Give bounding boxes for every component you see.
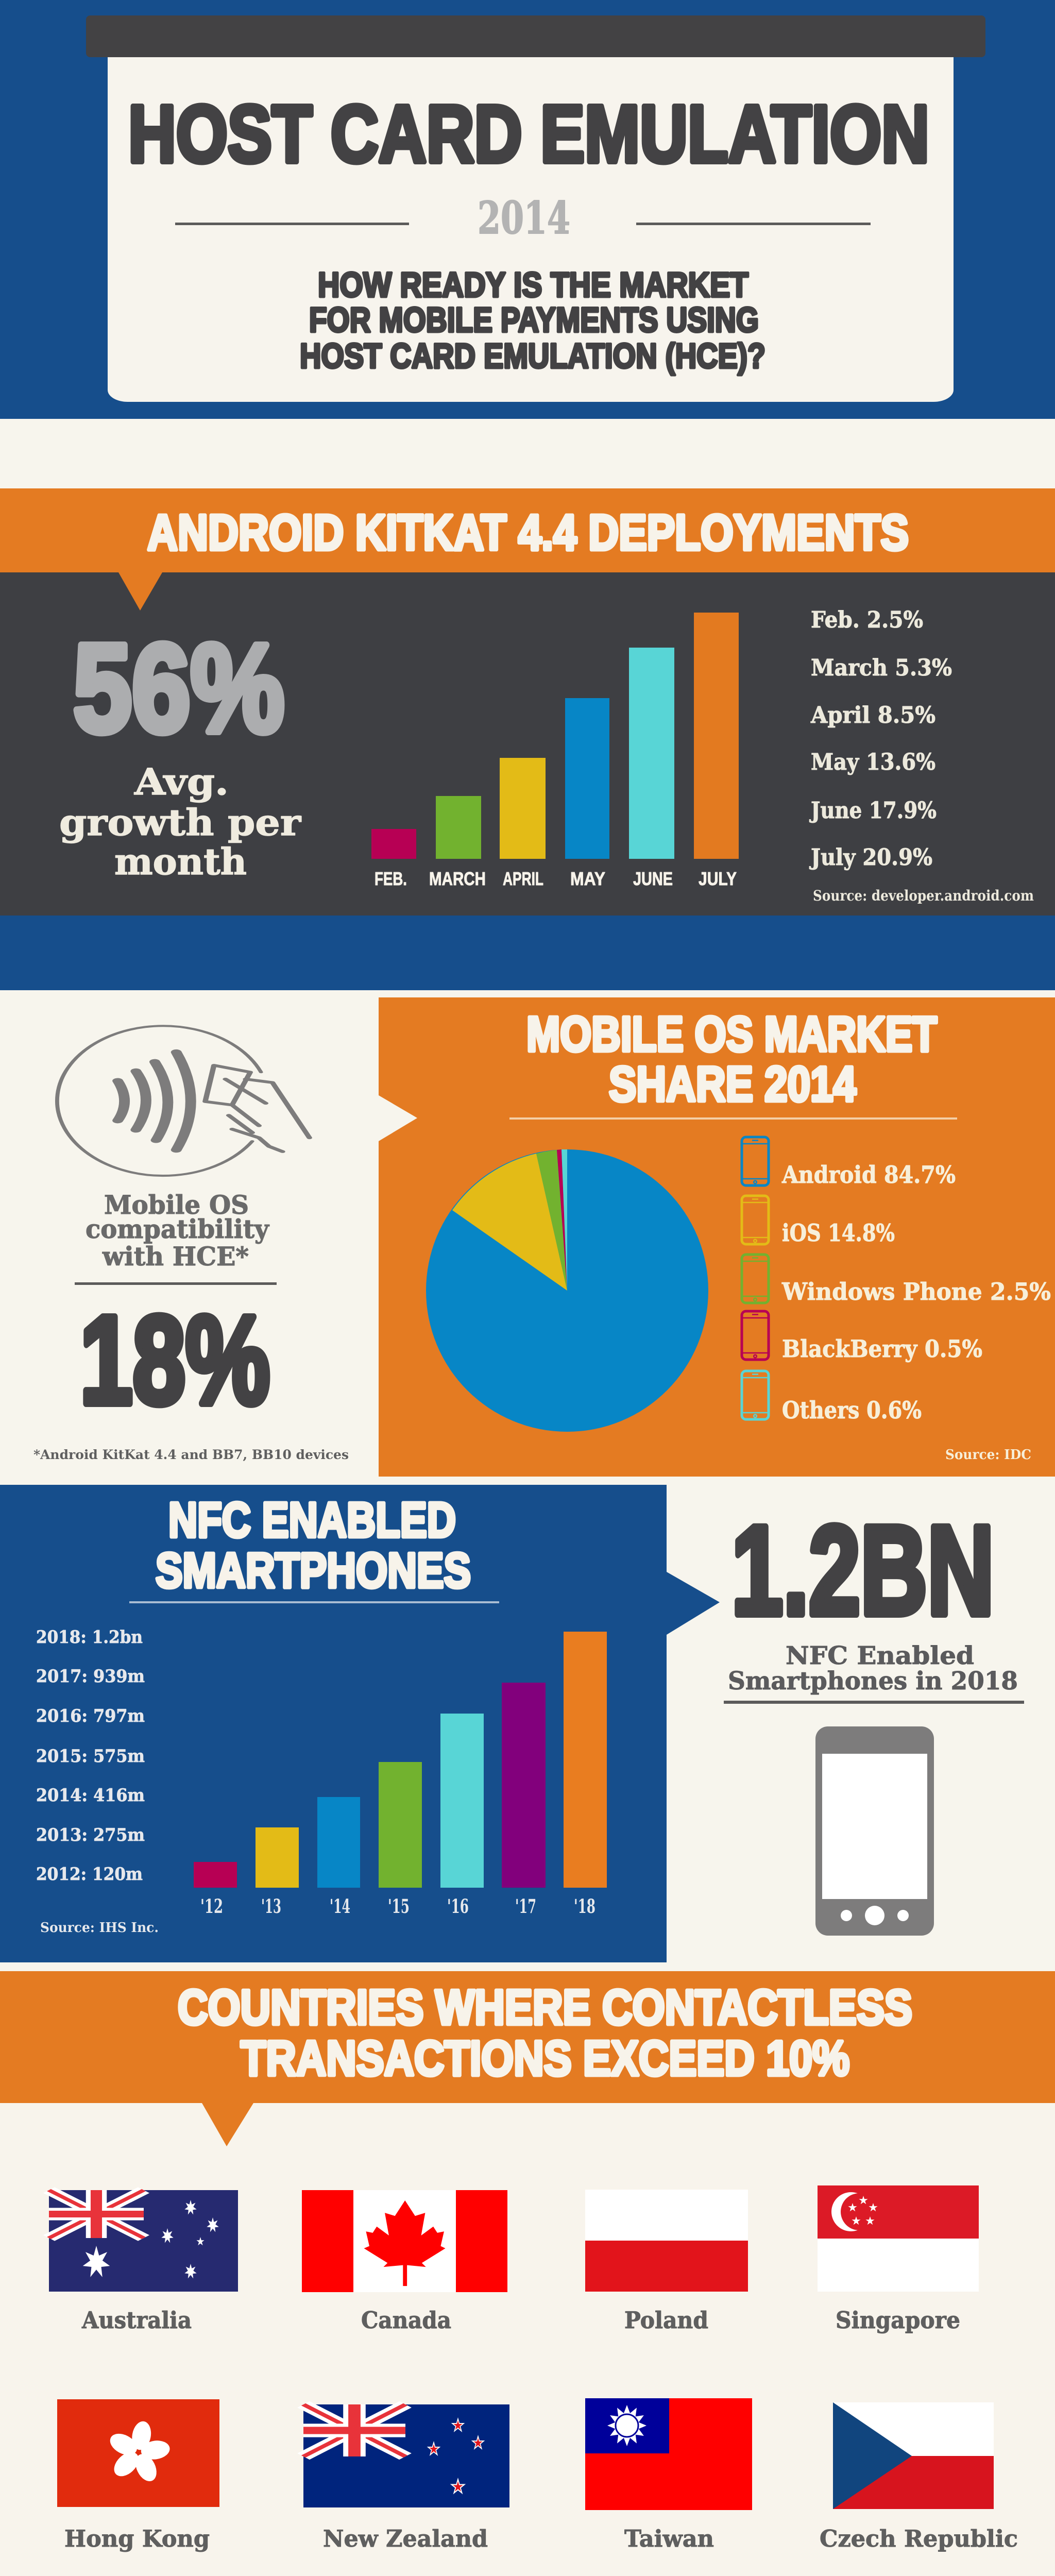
bar chart: '16 — [447, 1895, 469, 1918]
stat caption: month — [114, 840, 247, 883]
monthly values list: June 17.9% — [809, 798, 937, 824]
stat caption — [728, 1641, 1018, 1696]
heading: MOBILE OS MARKET — [526, 1007, 937, 1062]
monthly values list: May 13.6% — [811, 749, 935, 775]
panel: NFC enabled smartphones — [0, 1485, 720, 1962]
bar chart: '12 — [200, 1895, 223, 1918]
legend: Android — [742, 1137, 956, 1189]
monthly values list: Feb. 2.5% — [811, 607, 923, 633]
panel: 1.2BN stat — [724, 1500, 1024, 1936]
stat caption: Avg. — [134, 760, 229, 803]
pointer — [118, 572, 162, 611]
bar chart: MARCH — [429, 868, 486, 889]
heading: SMARTPHONES — [156, 1543, 471, 1598]
stat caption: growth per — [59, 801, 301, 844]
flag: Canada — [302, 2190, 507, 2292]
subtitle question: HOST CARD EMULATION (HCE)? — [300, 336, 765, 376]
flag: Czech Republic — [833, 2402, 994, 2509]
yearly values list — [36, 1627, 145, 1885]
bar chart: JUNE — [633, 868, 673, 889]
bar chart: MAY — [570, 868, 605, 889]
subtitle question — [300, 265, 765, 376]
panel: mobile OS compatibility — [33, 1026, 349, 1462]
heading: ANDROID KITKAT 4.4 DEPLOYMENTS — [147, 504, 909, 561]
compatibility caption: compatibility — [86, 1214, 270, 1244]
flag: New Zealand — [303, 2404, 509, 2507]
arrow — [667, 1572, 720, 1635]
year 2014 with rules — [175, 192, 871, 244]
stat caption: Smartphones in 2018 — [728, 1667, 1018, 1696]
bar chart: '13 — [261, 1895, 281, 1918]
yearly values list: 2012: 120m — [36, 1864, 143, 1885]
label: New Zealand: New Zealand — [323, 2525, 488, 2552]
bar chart: '15 — [388, 1895, 410, 1918]
monthly values list: April 8.5% — [810, 702, 935, 728]
legend: iOS: iOS 14.8% — [782, 1219, 895, 1247]
monthly values list: March 5.3% — [811, 655, 952, 681]
panel: Android KitKat deployments — [0, 488, 1055, 990]
label: Poland: Poland — [624, 2307, 708, 2334]
heading — [156, 1493, 471, 1598]
bar chart: '18 — [574, 1895, 595, 1918]
dark top bar — [86, 15, 985, 57]
flag: Australia — [49, 2190, 238, 2292]
label: Hong Kong: Hong Kong — [64, 2525, 210, 2552]
label: Canada: Canada — [361, 2307, 451, 2334]
heading — [178, 1980, 912, 2086]
yearly values list: 2017: 939m — [36, 1666, 145, 1687]
yearly values list: 2014: 416m — [36, 1785, 145, 1806]
subtitle question: HOW READY IS THE MARKET — [318, 265, 748, 304]
yearly values list: 2015: 575m — [36, 1746, 145, 1767]
heading — [526, 1007, 937, 1112]
bar chart — [194, 1632, 607, 1918]
bar chart: '14 — [330, 1895, 350, 1918]
panel: header — [0, 0, 1055, 419]
monthly values list: July 20.9% — [809, 844, 932, 871]
flag: Taiwan — [585, 2398, 752, 2510]
monthly values list — [809, 607, 952, 871]
heading: TRANSACTIONS EXCEED 10% — [241, 2031, 849, 2086]
icon: smartphone — [815, 1726, 934, 1936]
footnote: *Android KitKat 4.4 and BB7, BB10 devices — [33, 1447, 349, 1462]
bar chart: APRIL — [503, 868, 543, 889]
legend: Others: Others 0.6% — [782, 1396, 922, 1424]
flag: Poland — [585, 2190, 748, 2292]
bar chart: JULY — [699, 868, 737, 889]
label: Taiwan: Taiwan — [624, 2525, 714, 2552]
bar chart: FEB. — [375, 868, 407, 889]
big stat 18%: 18% — [80, 1290, 270, 1430]
pie chart — [426, 1149, 708, 1432]
year 2014 with rules: 2014 — [478, 192, 570, 244]
compatibility caption — [86, 1190, 270, 1272]
big stat 56%: 56% — [73, 618, 284, 758]
heading: SHARE 2014 — [609, 1057, 856, 1112]
panel: mobile OS market share — [379, 997, 1055, 1477]
heading: COUNTRIES WHERE CONTACTLESS — [178, 1980, 912, 2035]
compatibility caption: with HCE* — [102, 1241, 249, 1272]
legend: Android: Android 84.7% — [781, 1161, 956, 1189]
bar chart: '17 — [515, 1895, 536, 1918]
label: Singapore: Singapore — [836, 2307, 960, 2334]
flag: Hong Kong — [57, 2399, 219, 2507]
legend: BlackBerry: BlackBerry 0.5% — [782, 1335, 982, 1363]
yearly values list: 2018: 1.2bn — [36, 1627, 143, 1648]
notch arrow — [379, 1095, 417, 1141]
stat caption: NFC Enabled — [786, 1641, 974, 1670]
panel: contactless countries — [0, 1971, 1055, 2576]
stat caption — [59, 760, 301, 883]
yearly values list: 2016: 797m — [36, 1706, 145, 1726]
source: Source: IDC — [945, 1447, 1031, 1463]
source: Source: IHS Inc. — [40, 1920, 159, 1936]
icon: contactless card — [57, 1026, 310, 1176]
yearly values list: 2013: 275m — [36, 1825, 145, 1845]
label: Australia: Australia — [81, 2307, 192, 2334]
legend: Others — [742, 1371, 922, 1424]
heading: NFC ENABLED — [168, 1493, 456, 1548]
bar chart — [371, 613, 739, 889]
legend: Windows Phone — [742, 1255, 1051, 1306]
legend: BlackBerry — [742, 1311, 982, 1363]
header card — [108, 54, 954, 402]
legend: iOS — [742, 1196, 895, 1247]
subtitle question: FOR MOBILE PAYMENTS USING — [309, 300, 759, 340]
compatibility caption: Mobile OS — [104, 1190, 249, 1220]
flag: Singapore — [818, 2185, 979, 2292]
pointer — [202, 2103, 253, 2146]
label: Czech Republic: Czech Republic — [820, 2525, 1018, 2552]
